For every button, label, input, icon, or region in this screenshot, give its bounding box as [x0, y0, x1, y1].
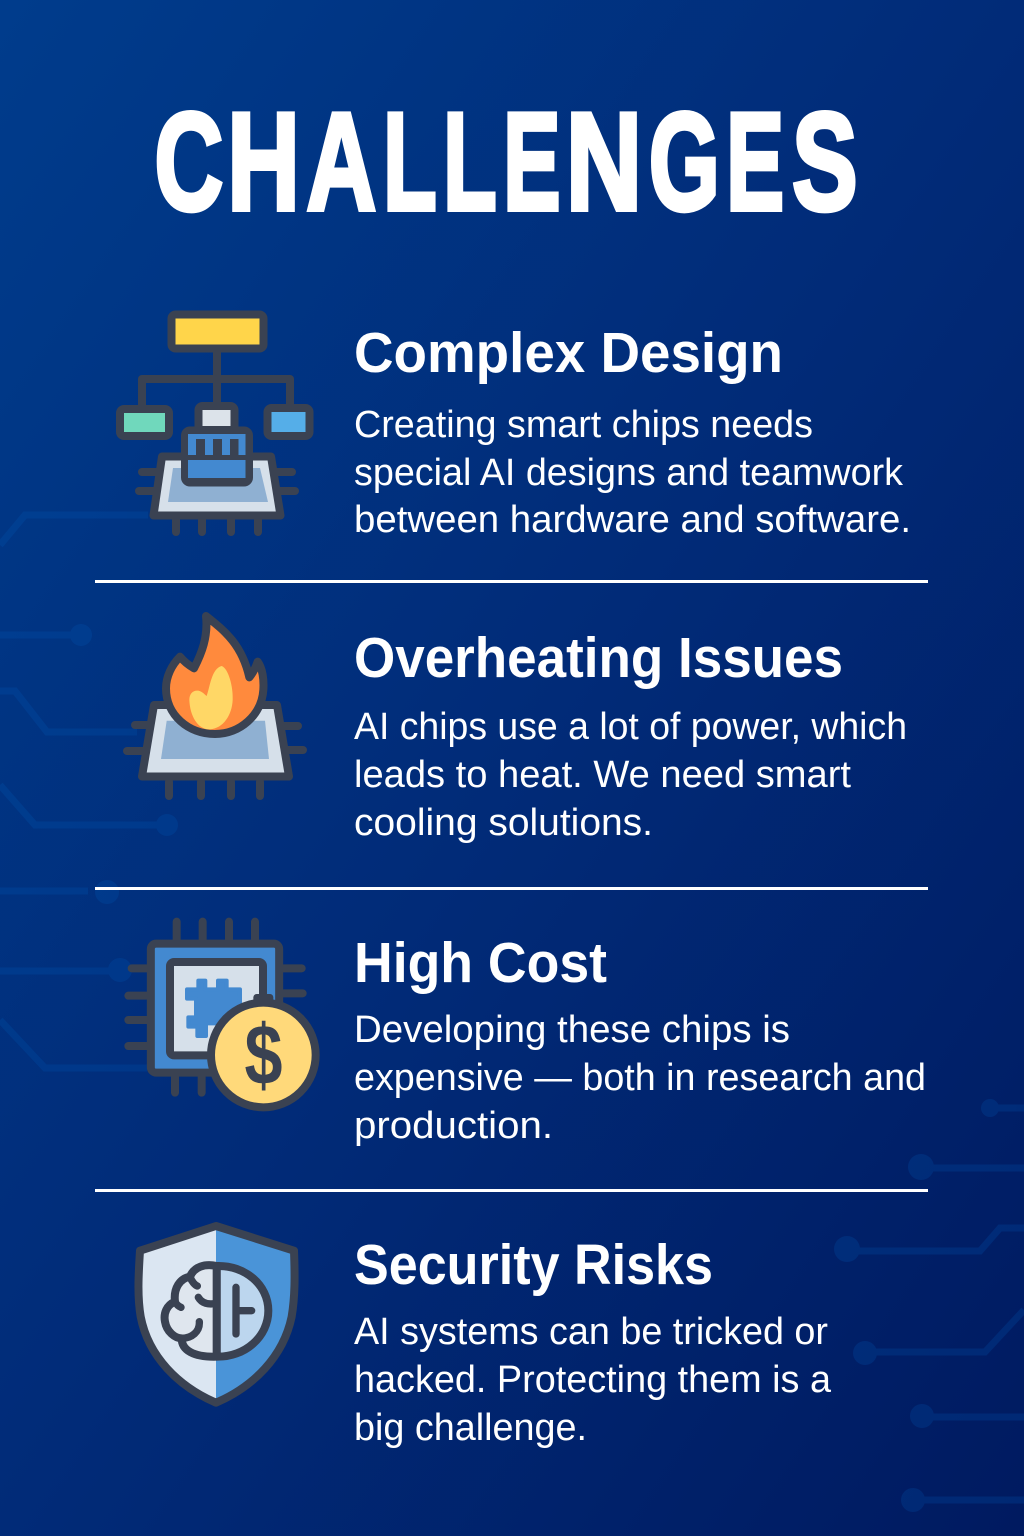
icon: chip hierarchy diagram — [120, 314, 310, 532]
description: high cost: production. — [354, 1105, 553, 1147]
description: security risks: hacked. Protecting them is a — [354, 1359, 832, 1401]
title: N — [566, 84, 642, 240]
title: E — [726, 84, 784, 240]
description: high cost: Developing these chips is — [354, 1009, 790, 1051]
divider — [95, 1189, 928, 1192]
title: L — [383, 84, 437, 240]
icon: shield with brain — [138, 1226, 295, 1403]
panel: security risks — [138, 1226, 832, 1449]
description: complex design: between hardware and software. — [354, 499, 911, 541]
icon: chip with dollar coin — [128, 922, 316, 1107]
panel: overheating issues — [127, 616, 907, 844]
panel: complex design — [120, 314, 911, 541]
description: high cost — [354, 1009, 926, 1147]
panel: high cost — [128, 922, 926, 1147]
description: security risks: big challenge. — [354, 1407, 587, 1449]
description: security risks: AI systems can be tricked or — [354, 1311, 828, 1353]
circuit trace background pattern — [0, 515, 1024, 1512]
description: overheating issues: cooling solutions. — [354, 802, 653, 844]
divider — [95, 887, 928, 890]
title: S — [792, 84, 858, 240]
title: H — [227, 84, 300, 240]
description: complex design: special AI designs and teamwork — [354, 452, 904, 494]
title: E — [503, 84, 560, 240]
heading: high cost: High Cost — [354, 931, 607, 995]
description: security risks — [354, 1311, 832, 1449]
description: complex design — [354, 404, 911, 541]
description: overheating issues: AI chips use a lot of power, which — [354, 706, 907, 748]
description: overheating issues — [354, 706, 907, 844]
description: high cost: expensive — both in research and — [354, 1057, 926, 1099]
title: L — [443, 84, 497, 240]
icon: flame on chip — [127, 616, 303, 796]
title: C — [154, 84, 223, 240]
description: overheating issues: leads to heat. We need smart — [354, 754, 851, 796]
description: complex design: Creating smart chips needs — [354, 404, 813, 446]
dollar sign: $ — [244, 1008, 282, 1103]
heading: overheating issues: Overheating Issues — [354, 626, 843, 690]
title: G — [649, 84, 720, 240]
heading: security risks: Security Risks — [354, 1233, 713, 1297]
title: A — [306, 84, 376, 240]
divider — [95, 580, 928, 583]
heading: complex design: Complex Design — [354, 321, 783, 385]
